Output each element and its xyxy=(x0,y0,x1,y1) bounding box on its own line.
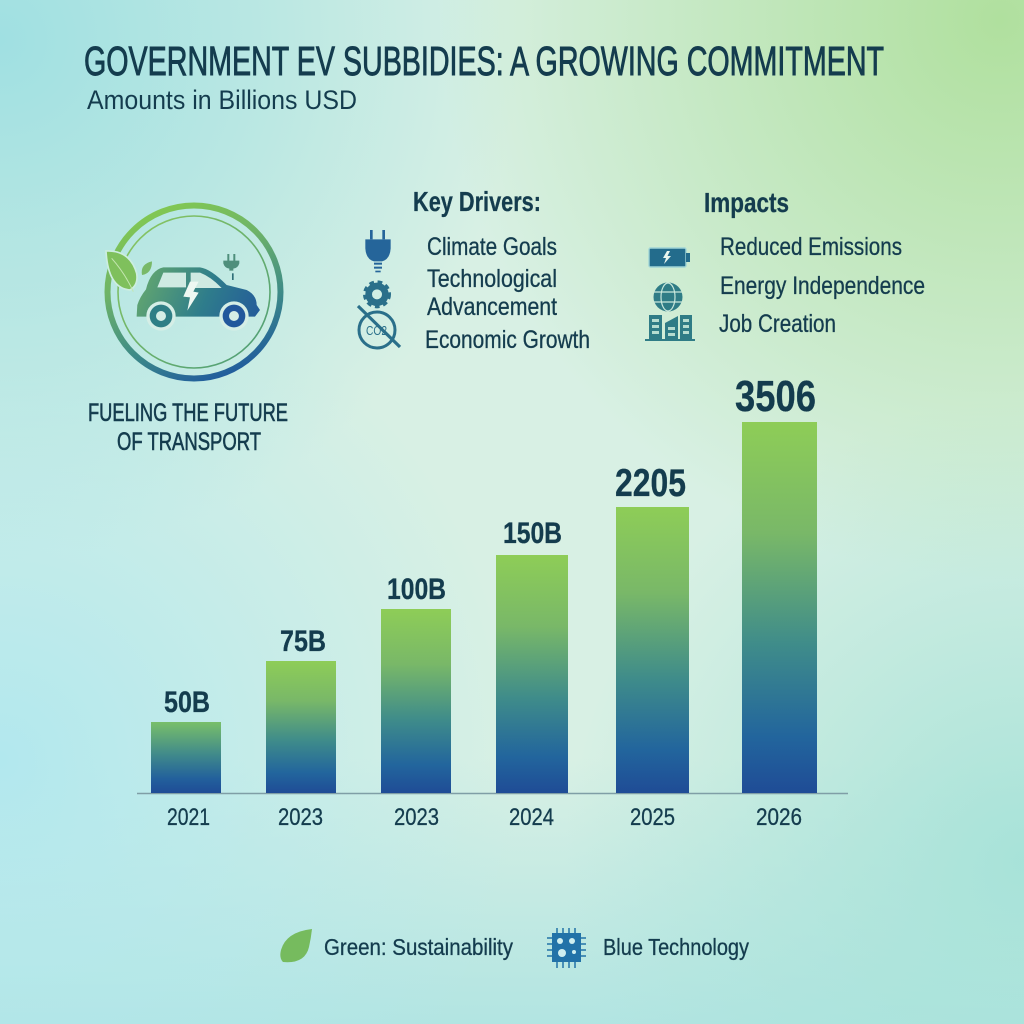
bar: 2024 150B xyxy=(496,517,568,831)
bar: 2021 50B: 50B xyxy=(164,686,210,719)
bar: 2023 100B: 2023 xyxy=(394,804,439,831)
list: drivers: Economic Growth xyxy=(425,326,590,354)
legend label: blue: Blue Technology xyxy=(603,934,749,960)
bar: 2021 50B: 2021 xyxy=(167,804,210,831)
panel: impacts xyxy=(645,187,925,341)
icon: gear xyxy=(365,282,389,307)
icon: no CO2: CO2 xyxy=(366,323,387,338)
heading: impacts: Impacts xyxy=(704,187,789,218)
bar: 2023 100B: 100B xyxy=(387,573,446,606)
list: impacts: Job Creation xyxy=(719,310,836,338)
bar: 2023 100B xyxy=(381,573,451,831)
bar: 2023 75B: 2023 xyxy=(278,804,323,831)
emblem caption: OF TRANSPORT xyxy=(117,428,261,456)
list: impacts: Energy Independence xyxy=(720,272,925,300)
bar: 2025 2205: 2205 xyxy=(615,462,686,505)
bar: 2024 150B: 150B xyxy=(503,517,562,550)
bar: 2026 3506: 3506 xyxy=(735,372,816,421)
bar: 2026 3506 xyxy=(735,372,817,831)
icon: no CO2 xyxy=(358,306,400,348)
icon: plug xyxy=(365,230,391,272)
axis line xyxy=(137,792,848,794)
icon: green leaf xyxy=(280,929,312,962)
bar chart xyxy=(137,372,848,831)
emblem caption: FUELING THE FUTURE xyxy=(88,399,288,427)
bar: 2026 3506: 2026 xyxy=(756,804,802,831)
subtitle: Amounts in Billions USD xyxy=(87,85,357,115)
bar: 2025 2205 xyxy=(615,462,689,831)
bar: 2023 75B: 75B xyxy=(280,625,326,658)
list: drivers: Climate Goals xyxy=(427,233,557,261)
bar: 2025 2205: 2025 xyxy=(630,804,675,831)
panel: key drivers xyxy=(358,186,590,354)
emblem caption xyxy=(88,399,288,456)
legend label: green: Green: Sustainability xyxy=(324,934,513,960)
icon: buildings xyxy=(645,315,695,341)
bar: 2021 50B xyxy=(151,686,221,831)
list: impacts xyxy=(719,233,925,338)
list: drivers: Advancement xyxy=(427,293,557,321)
icon: battery xyxy=(649,248,690,267)
bar: 2023 75B xyxy=(266,625,336,831)
bar: 2024 150B: 2024 xyxy=(509,804,554,831)
icon: ring xyxy=(108,206,280,378)
legend xyxy=(280,928,749,968)
list: impacts: Reduced Emissions xyxy=(720,233,902,261)
icon: globe xyxy=(654,282,682,312)
list: drivers xyxy=(425,233,590,354)
icon: electric car with leaf and plug xyxy=(106,251,260,331)
heading: key drivers: Key Drivers: xyxy=(413,186,541,217)
icon: blue chip xyxy=(547,928,586,968)
list: drivers: Technological xyxy=(427,265,557,293)
panel: emblem xyxy=(106,206,280,378)
